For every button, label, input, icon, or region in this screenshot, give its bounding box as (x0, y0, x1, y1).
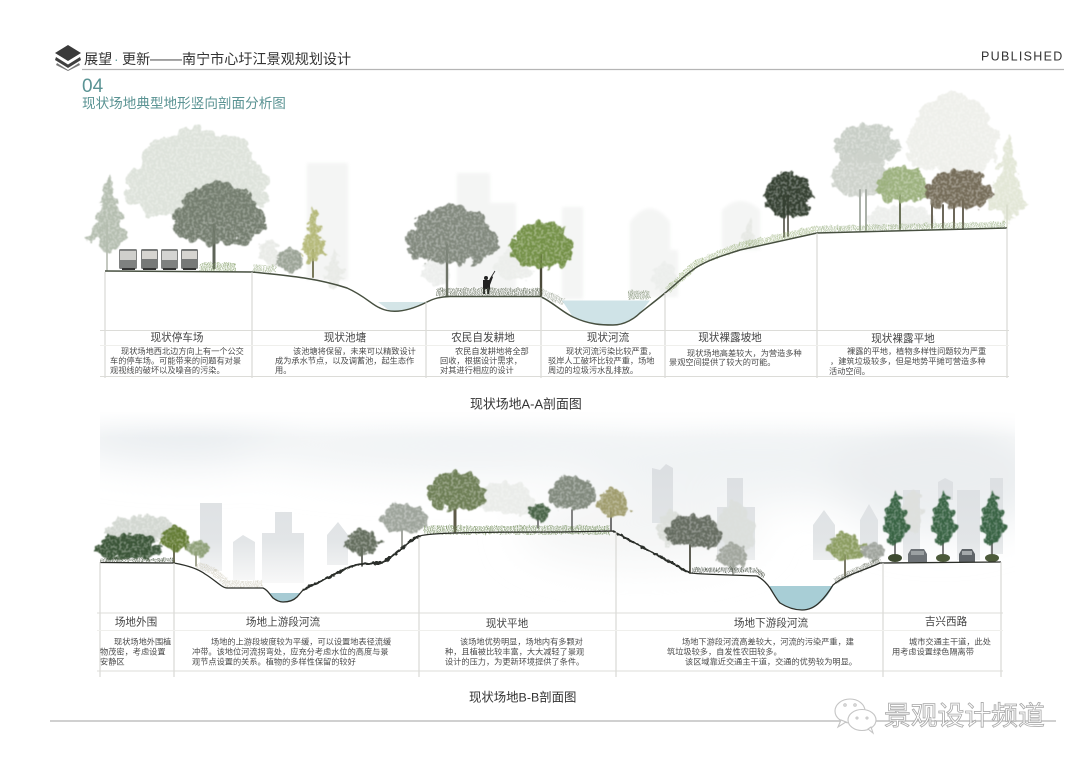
header title: 展望 (84, 51, 112, 67)
B pale low tree (715, 544, 750, 575)
B yellow plateau tree (595, 489, 630, 530)
column: river (548, 331, 656, 375)
column: pond: 现状池塘 (324, 331, 367, 344)
caption A-A: 现状场地A-A剖面图 (470, 396, 582, 412)
column: downstream river: 筑垃圾较多，自发性农田较多。 (667, 646, 782, 656)
header title: —— (150, 51, 182, 68)
column: bare flat: ，建筑垃圾较多，但是地势平摊可营造多种 (830, 356, 986, 366)
column: Jixing West Road: 用考虑设置绿色隔离带 (892, 646, 974, 656)
A pale trunks (860, 190, 1007, 230)
footer rule (50, 720, 1056, 722)
A light green tree (876, 165, 927, 229)
column: pond: 用。 (275, 366, 291, 375)
B sky (100, 423, 1015, 552)
column: bare slope: 现状裸露坡地 (698, 331, 762, 344)
column: downstream river: 场地下游段河流高差较大，河流的污染严重，建 (682, 636, 854, 646)
column: site perimeter: 现状场地外围植 (114, 636, 171, 646)
A terrain profile (105, 228, 1007, 325)
column: flat ground: 设计的压力，为更新环境提供了条件。 (445, 656, 584, 666)
column: parking lot: 现状停车场 (151, 331, 203, 344)
column: bare flat (829, 332, 986, 376)
watermark wechat icon (835, 699, 876, 733)
column: river: 驳岸人工破坏比较严重，场地 (548, 356, 654, 366)
column: downstream river (667, 616, 857, 666)
column: bare flat: 现状裸露平地 (871, 332, 935, 345)
column: farmland: 对其进行相应的设计 (440, 365, 514, 375)
column: flat ground: 种，且植被比较丰富，大大减轻了景观 (445, 646, 584, 656)
column: farmland: 回收，根据设计需求， (440, 356, 522, 366)
B table grid (97, 532, 1003, 677)
A small round shrub (275, 249, 302, 270)
column: downstream river: 场地下游段河流 (734, 616, 808, 630)
A dark slope tree (763, 170, 812, 237)
column: upstream river: 场地上游段河流 (246, 616, 320, 628)
B pale background trees (104, 481, 922, 552)
column: Jixing West Road: 吉兴西路 (925, 615, 968, 628)
column: Jixing West Road (892, 615, 991, 656)
B ground grass (100, 530, 880, 584)
column: upstream river: 冲带。该地位河流拐弯处，应充分考虑水位的高度与景 (192, 646, 389, 656)
B upstream water (270, 593, 300, 602)
A ginkgo conifer (297, 208, 329, 277)
section number: 04 (82, 76, 104, 97)
A pond water (378, 302, 425, 311)
A brown tree (924, 169, 992, 229)
B small dark tree (528, 504, 548, 528)
B big plateau tree (426, 470, 486, 531)
B light small tree (186, 541, 207, 566)
column: river: 现状河流 (587, 331, 630, 344)
column: Jixing West Road: 城市交通主干道，此处 (909, 636, 991, 646)
subtitle: 现状场地典型地形竖向剖面分析图 (82, 96, 286, 111)
column: bare slope: 景观空间提供了较大的可能。 (669, 357, 775, 367)
B olive tree (159, 527, 190, 563)
B downstream water (770, 586, 833, 610)
column: pond: 成为承水节点，以及调蓄池，起生态作 (275, 356, 414, 366)
B pale riverbank tree (860, 543, 883, 560)
column: bare slope: 现状场地高差较大，为营造多种 (687, 348, 802, 358)
column: bare flat: 活动空间。 (829, 366, 870, 376)
header title: 南宁市心圩江景观规划设计 (182, 51, 351, 67)
A person with hoe (483, 271, 495, 294)
column: flat ground (445, 617, 584, 666)
B left dark shrubs (94, 534, 161, 559)
header title: 更新 (122, 51, 150, 67)
caption B-B: 现状场地B-B剖面图 (469, 690, 576, 704)
column: pond: 该池塘将保留，未来可以精致设计 (293, 346, 416, 356)
column: upstream river: 观节点设置的关系。植物的多样性保留的较好 (192, 656, 356, 666)
A grass strips (200, 224, 1005, 302)
A pale background trees (124, 92, 1029, 292)
section A-A illustration (85, 92, 1029, 325)
A background skyline (307, 163, 760, 299)
watermark text: 景观设计频道 (884, 701, 1045, 731)
B descending slope tree (664, 514, 722, 573)
column: flat ground: 现状平地 (486, 617, 529, 630)
B street tree 3 (979, 492, 1005, 562)
B car 1 (908, 549, 927, 562)
column: flat ground: 该场地优势明显，场地内有多颗对 (460, 636, 583, 646)
column: farmland (440, 331, 529, 375)
column: site perimeter (100, 616, 171, 666)
A centre grey tree (404, 204, 497, 296)
column: parking lot: 车的停车场。可能带来的问题有对景 (110, 356, 241, 366)
A table grid (100, 228, 1009, 378)
B grey plateau tree (547, 475, 595, 531)
A river water (562, 300, 650, 325)
column: site perimeter: 物茂密，考虑设置 (100, 646, 166, 656)
header rule (82, 68, 1064, 70)
B green riverbank tree (825, 533, 865, 576)
column: bare flat: 裸露的平地，植物多样性问题较为严重 (847, 346, 986, 356)
B street tree 2 (930, 492, 956, 562)
column: farmland: 农民自发耕地 (451, 331, 515, 344)
B pale slope tree (378, 503, 427, 548)
header icon: stacked layers (55, 45, 81, 71)
column: bare slope (669, 331, 802, 367)
A green tree (509, 220, 574, 295)
column: parking lot (110, 331, 244, 375)
A left conifer (85, 172, 131, 270)
B terrain profile (100, 531, 1001, 610)
column: parking lot: 现状场地西北边方向上有一个公交 (121, 346, 244, 356)
published label: PUBLISHED (981, 50, 1064, 64)
section B-B table (97, 532, 1003, 677)
A dark grey tree (171, 182, 264, 268)
header title: · (114, 51, 119, 67)
column: farmland: 农民自发耕地将全部 (455, 346, 529, 356)
column: river: 周边的垃圾污水乱排放。 (548, 365, 638, 375)
column: pond (275, 331, 416, 375)
column: site perimeter: 场地外围 (115, 616, 157, 628)
column: site perimeter: 安静区 (100, 656, 125, 666)
column: upstream river (192, 616, 391, 666)
B street tree 1 (882, 492, 908, 562)
column: downstream river: 该区域靠近交通主干道，交通的优势较为明显。 (685, 656, 857, 666)
section A-A table (100, 228, 1009, 378)
A parking lot buses (119, 249, 198, 270)
column: parking lot: 观视线的破坏以及噪音的污染。 (110, 365, 225, 375)
B skyline (200, 464, 1003, 583)
B grey slope tree (343, 530, 382, 566)
column: upstream river: 场地的上游段坡度较为平缓，可以设置地表径流缓 (211, 636, 391, 646)
section B-B illustration (93, 423, 1015, 611)
column: river: 现状河流污染比较严重， (566, 346, 656, 356)
B car 2 (959, 549, 975, 562)
